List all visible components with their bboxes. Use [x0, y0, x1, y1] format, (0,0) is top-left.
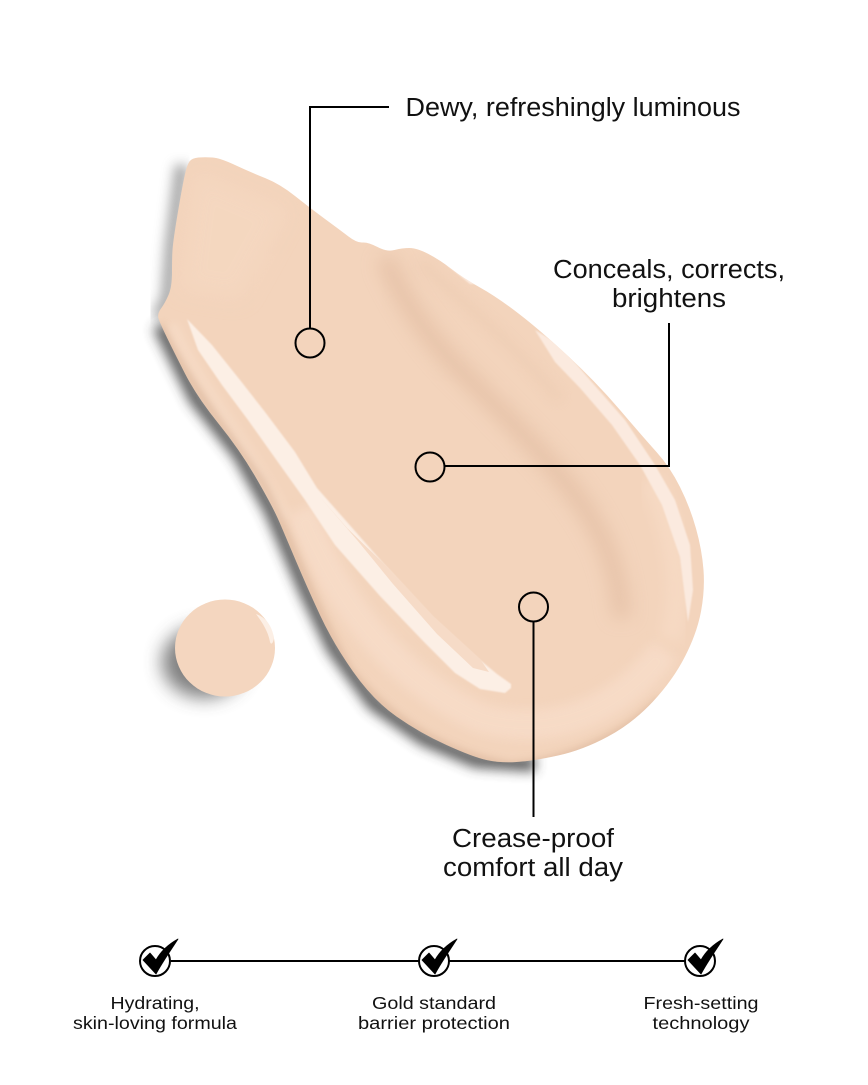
callout text: Crease-proof [452, 825, 615, 853]
callout line [532, 622, 534, 817]
benefit label 2: Gold standard [372, 993, 496, 1013]
long left highlight [187, 319, 511, 693]
callout marker [519, 592, 548, 622]
swatch body [158, 157, 704, 762]
benefit label 3: technology [652, 1013, 750, 1033]
callout text: comfort all day [443, 854, 623, 882]
upper crease [420, 262, 560, 400]
callout: dewy [296, 94, 740, 358]
callout: crease-proof [443, 592, 623, 882]
crease shadow [385, 258, 622, 618]
lower edge shading [160, 325, 660, 766]
benefit label 1: skin-loving formula [73, 1013, 237, 1033]
inner highlight pocket [332, 510, 489, 672]
droplet shadow [162, 626, 246, 698]
benefit label 1: Hydrating, [110, 993, 200, 1013]
benefit label 3: Fresh-setting [644, 993, 758, 1013]
callout text: brightens [612, 285, 726, 313]
benefits timeline [73, 939, 758, 1033]
callout text: Dewy, refreshingly luminous [406, 94, 740, 122]
icon: check 1 [140, 939, 178, 976]
swatch shadow: upper left [158, 165, 182, 318]
callout marker [296, 328, 324, 358]
droplet body [175, 600, 275, 696]
right rim highlight [535, 330, 693, 622]
connecting line [171, 960, 685, 962]
callout line [445, 323, 669, 466]
swatch shadow: lower left [160, 325, 535, 764]
icon: check 3 [685, 939, 723, 976]
top rim glint [450, 268, 474, 284]
icon: check 2 [419, 939, 457, 976]
lighter left rim [170, 325, 285, 520]
benefit label 2: barrier protection [358, 1013, 510, 1033]
swatch shading and highlights [162, 259, 694, 762]
foundation swatch [158, 157, 704, 766]
right outer lobe tone [650, 480, 677, 640]
lighter lower lobe [300, 510, 665, 725]
callout line [310, 107, 389, 328]
callout: conceals [416, 256, 785, 482]
callout text: Conceals, corrects, [553, 256, 785, 284]
callout marker [416, 452, 444, 482]
droplet highlight [256, 614, 274, 644]
upper left lighter tone [180, 170, 290, 300]
foundation droplet [162, 600, 275, 698]
